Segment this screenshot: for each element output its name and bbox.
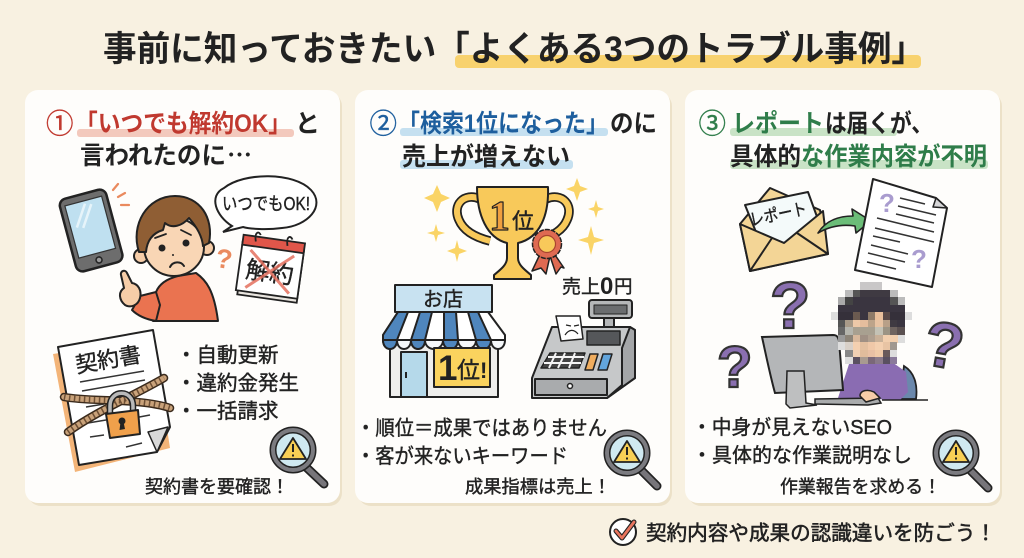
bullet list: case 1: ・一括請求 bbox=[176, 400, 278, 423]
illustration: confused person bbox=[120, 196, 218, 321]
title: 事前に知っておきたい「よくある3つのトラブル事例」 bbox=[103, 29, 925, 69]
icon: check mark bbox=[610, 519, 636, 545]
icon: shop: お店 bbox=[423, 288, 463, 311]
heading: case 1: 「いつでも解約OK」 bbox=[75, 110, 291, 138]
heading: case 1: と bbox=[295, 110, 320, 138]
bullet list: case 3: ・具体的な作業説明なし bbox=[692, 444, 912, 467]
bullet list: case 1 bbox=[176, 344, 299, 423]
panel: case 2 bbox=[355, 90, 672, 506]
icon: locked contract bbox=[53, 330, 170, 472]
speech bubble bbox=[215, 176, 316, 232]
icon: cash register bbox=[532, 300, 635, 398]
panel: case 3 bbox=[685, 90, 1002, 506]
heading: case 2 bbox=[370, 108, 657, 171]
heading: case 3: は届くが、 bbox=[825, 109, 933, 138]
icon: calendar with cancel: 解約 bbox=[244, 256, 295, 290]
heading: case 1: … bbox=[227, 136, 252, 172]
icon: question marks: ? bbox=[770, 268, 810, 342]
bullet list: case 3 bbox=[692, 416, 912, 467]
icon: question marks: ? bbox=[717, 335, 752, 400]
callout: case 2: 成果指標は売上！ bbox=[465, 477, 611, 497]
icon: question marks bbox=[717, 268, 970, 400]
icon: shop bbox=[383, 285, 505, 397]
icon: trophy bbox=[457, 187, 569, 279]
bullet list: case 2 bbox=[356, 417, 607, 468]
bullet list: case 2: ・客が来ないキーワード bbox=[356, 445, 568, 468]
bullet list: case 3: ・中身が見えないSEO bbox=[692, 416, 892, 439]
heading: case 3: な作業内容が不明 bbox=[801, 142, 987, 171]
question mark: ? bbox=[214, 243, 234, 275]
icon: warning magnifier bbox=[273, 430, 324, 484]
illustration: person at computer with mosaic face bbox=[762, 282, 928, 408]
heading: case 3: レポート bbox=[732, 110, 824, 138]
speech bubble: いつでもOK! bbox=[222, 194, 310, 214]
heading: case 2: 「検索1位になった」 bbox=[398, 110, 608, 138]
icon: locked contract: 契約書 bbox=[74, 342, 143, 378]
icon: unclear document bbox=[855, 179, 947, 287]
label: sales zero: 0 bbox=[600, 273, 613, 300]
icon: warning magnifier bbox=[607, 433, 657, 486]
heading: case 3 bbox=[698, 108, 988, 171]
icon: trophy: 1 bbox=[489, 194, 510, 240]
bullet list: case 1: ・自動更新 bbox=[176, 344, 278, 367]
heading: case 2: ② bbox=[370, 108, 397, 139]
heading: case 1 bbox=[46, 108, 320, 172]
callout: case 1: 契約書を要確認！ bbox=[145, 477, 289, 497]
icon: shop: 位 bbox=[457, 357, 480, 383]
icon: unclear document: ? bbox=[879, 188, 895, 218]
label: sales zero bbox=[562, 273, 633, 300]
icon: unclear document: ? bbox=[911, 244, 927, 274]
label: sales zero: 売上 bbox=[562, 276, 600, 298]
icon: question marks: ? bbox=[919, 306, 970, 384]
heading: case 1: 言われたのに bbox=[80, 142, 226, 170]
icon: shop: 1 bbox=[438, 349, 457, 388]
icon: shop: ! bbox=[480, 358, 487, 383]
heading: case 3: 具体的 bbox=[730, 143, 801, 171]
heading: case 2: 売上が増えない bbox=[402, 142, 570, 171]
bullet list: case 2: ・順位＝成果ではありません bbox=[356, 417, 607, 440]
footer text: 契約内容や成果の認識違いを防ごう！ bbox=[646, 522, 996, 545]
icon: report envelope bbox=[740, 188, 828, 271]
bullet list: case 1: ・違約金発生 bbox=[176, 372, 299, 395]
arrow: report to document bbox=[818, 209, 871, 233]
callout: case 3: 作業報告を求める！ bbox=[780, 477, 941, 497]
icon: sparkles bbox=[424, 178, 604, 262]
footer message bbox=[610, 519, 996, 545]
heading: case 1: ① bbox=[46, 108, 74, 139]
label: sales zero: 円 bbox=[614, 276, 633, 297]
icon: report envelope: レポート bbox=[748, 199, 809, 230]
heading: case 3: ③ bbox=[698, 108, 726, 139]
heading: case 2: のに bbox=[610, 110, 657, 138]
panel: case 1 bbox=[25, 90, 342, 506]
icon: calendar with cancel bbox=[235, 231, 306, 303]
icon: warning magnifier bbox=[936, 433, 988, 488]
icon: smartphone bbox=[58, 188, 124, 273]
icon: vibration marks bbox=[113, 184, 129, 205]
icon: trophy: 位 bbox=[512, 209, 534, 234]
